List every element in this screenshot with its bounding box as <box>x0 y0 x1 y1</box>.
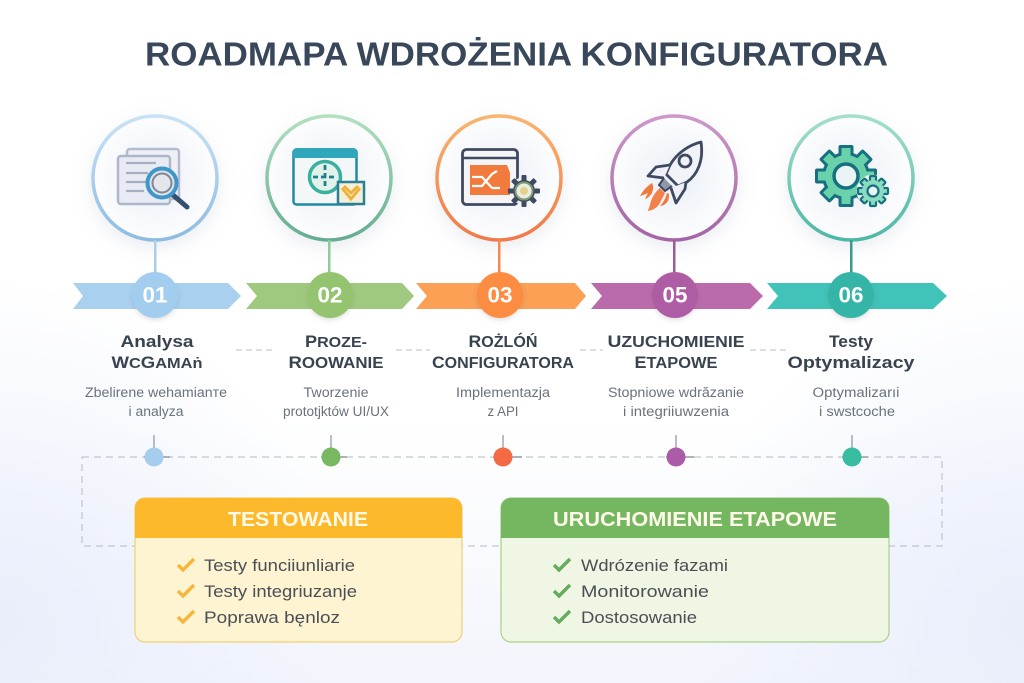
step 1: analysis <box>93 116 217 272</box>
checklist: staged launch: Monitorowanie <box>581 582 709 601</box>
dot 5 <box>842 448 862 466</box>
title: ROADMAPA WDROŻENIA KONFIGURATORA <box>145 36 888 72</box>
step 5: optimisation <box>789 116 913 272</box>
dot 4 <box>666 448 686 466</box>
icon: window with clock and check <box>293 148 364 204</box>
checklist: testing: Testy integriuzanje <box>204 582 357 601</box>
icon: documents and magnifier <box>118 149 187 207</box>
description 5: Optymalizarıi <box>812 385 900 400</box>
ribbon 2 <box>246 283 414 309</box>
step 2 text: ROOWANIE <box>288 353 384 372</box>
step 4: launch <box>612 116 736 272</box>
description 2: Tworzenie <box>304 385 368 400</box>
badge 05: 05 <box>662 282 688 308</box>
step 3 text: CONFIGURATORA <box>432 353 574 372</box>
step 4 text: ETAPOWE <box>634 353 718 372</box>
step 2 text: prototjktów UI/UX <box>283 404 389 419</box>
badge 06 <box>828 272 874 318</box>
description 1: Zbelirene wehamianтe <box>85 385 227 400</box>
panel title: testing: TESTOWANIE <box>228 509 368 531</box>
icon: gears <box>815 145 890 208</box>
checklist: staged launch <box>554 556 728 627</box>
badge 02 <box>307 272 353 318</box>
panel: staged launch <box>501 498 889 642</box>
ring 5 <box>789 116 913 240</box>
heading 2: PROZE- <box>305 332 367 351</box>
checklist: staged launch: Dostosowanie <box>581 608 697 627</box>
checklist: testing: Poprawa bęnloz <box>204 608 340 627</box>
stem 1 <box>154 240 156 272</box>
step 4 text: i integriiuwzenia <box>623 404 730 419</box>
panel header: staged launch <box>501 498 889 538</box>
ribbon 5 <box>767 283 947 309</box>
step 1 text: WCGAMAṅ <box>112 353 202 372</box>
ribbon 3 <box>416 283 586 309</box>
dot 2 <box>322 448 340 466</box>
heading connectors <box>236 349 786 351</box>
step 1 text <box>85 332 227 419</box>
badge 05 <box>652 272 698 318</box>
description 3: Implementazja <box>456 385 551 400</box>
step 2 text <box>283 332 389 419</box>
ring 3 <box>437 116 561 240</box>
panel title: staged launch: URUCHOMIENIE ETAPOWE <box>553 509 837 531</box>
step 3 text: z API <box>488 404 518 419</box>
ring 2 <box>267 116 391 240</box>
panel: testing <box>135 498 462 642</box>
stem 2 <box>328 240 330 272</box>
badge 06: 06 <box>838 282 864 308</box>
timeline ribbons <box>73 283 947 309</box>
step 5 text: i swstcoche <box>819 404 895 419</box>
heading 4: UZUCHOMIENIE <box>608 332 744 351</box>
step 4 text <box>608 332 744 419</box>
panel header: testing <box>135 498 462 538</box>
step 2: design <box>267 116 391 272</box>
stem 4 <box>673 240 676 272</box>
step 3: configurator <box>437 116 561 272</box>
heading 3: ROŻLÓŃ <box>468 332 538 351</box>
badge 01 <box>132 272 178 318</box>
step 5 text: Optymalizacy <box>788 353 915 372</box>
icon: rocket <box>640 142 702 211</box>
step 1 text: i analyza <box>128 404 184 419</box>
description 4: Stopniowe wdrăzanie <box>608 385 744 400</box>
timeline dots <box>144 435 868 466</box>
step 5 text <box>788 332 915 419</box>
lower dashed connector frame <box>82 457 942 546</box>
checklist: testing: Testy funciiunliarie <box>204 556 355 575</box>
heading 1: Analysa <box>120 332 194 351</box>
badge 03: 03 <box>488 282 512 308</box>
ribbon 4 <box>591 283 763 309</box>
dot 1 <box>144 448 164 466</box>
dot 3 <box>494 448 512 466</box>
step 3 text <box>432 332 574 419</box>
badge 03 <box>477 272 523 318</box>
checklist: testing <box>178 556 357 627</box>
badge 02: 02 <box>318 282 342 308</box>
ribbon 1 <box>73 283 241 309</box>
stem 3 <box>498 240 500 272</box>
checklist: staged launch: Wdrózenie fazami <box>581 556 728 575</box>
badge 01: 01 <box>142 282 168 308</box>
ring 4 <box>612 116 736 240</box>
heading 5: Testy <box>829 332 874 351</box>
stem 5 <box>850 240 852 272</box>
icon: window with flow and gear <box>462 150 540 207</box>
ring 1 <box>93 116 217 240</box>
